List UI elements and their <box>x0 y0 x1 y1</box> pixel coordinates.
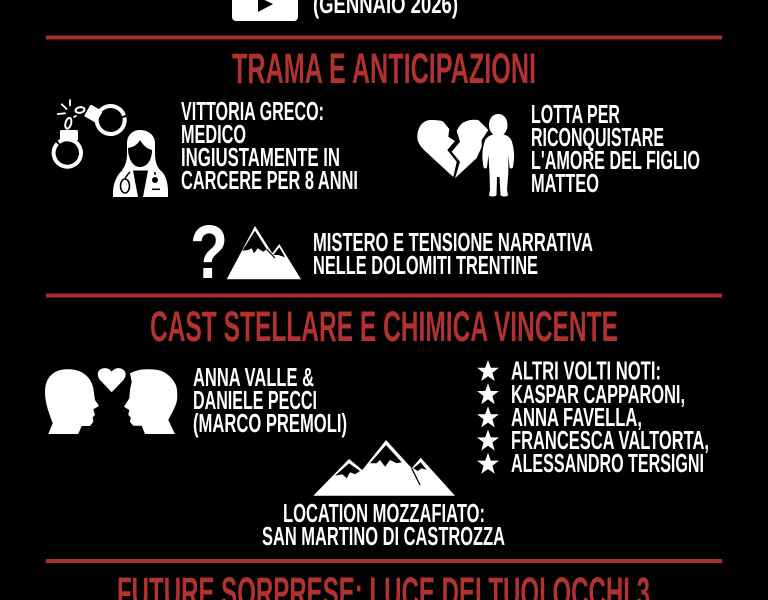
text: mistero e tensione: NELLE DOLOMITI TRENTINE <box>313 252 538 280</box>
icon: mountains <box>227 226 301 279</box>
icon: doctor <box>113 130 168 197</box>
text: anna valle: ANNA VALLE & <box>193 364 314 392</box>
heading: trama: TRAMA E ANTICIPAZIONI <box>232 46 536 93</box>
panel: cast stellare <box>45 304 709 551</box>
text: vittoria greco: INGIUSTAMENTE IN <box>181 144 340 172</box>
text: anna valle <box>193 364 347 438</box>
text: altri volti noti: ANNA FAVELLA, <box>511 404 642 432</box>
text: lotta per riconquistare: MATTEO <box>531 170 599 198</box>
text: vittoria greco: MEDICO <box>181 121 246 149</box>
panel: trama e anticipazioni <box>50 46 700 295</box>
text: altri volti noti: ALTRI VOLTI NOTI: <box>511 358 661 386</box>
icon: two heads and heart <box>45 368 177 434</box>
text: location <box>262 500 505 551</box>
text: location: SAN MARTINO DI CASTROZZA <box>262 523 505 551</box>
text: mistero e tensione <box>313 229 593 280</box>
text: vittoria greco: VITTORIA GRECO: <box>181 98 324 126</box>
text: altri volti noti <box>511 358 709 478</box>
text: vittoria greco <box>181 98 358 195</box>
text: location: LOCATION MOZZAFIATO: <box>283 500 485 528</box>
text: mistero e tensione: MISTERO E TENSIONE NARRATIVA <box>313 229 593 257</box>
icon: child <box>482 114 514 196</box>
text: lotta per riconquistare <box>531 101 700 198</box>
icon: video play button <box>232 0 298 21</box>
icon: broken heart <box>417 120 488 178</box>
icon: question mark: ? <box>190 210 228 295</box>
text: lotta per riconquistare: LOTTA PER <box>531 101 620 129</box>
text: anna valle: (MARCO PREMOLI) <box>193 410 347 438</box>
icon: broken handcuffs <box>50 100 130 171</box>
text: anna valle: DANIELE PECCI <box>193 387 317 415</box>
text: lotta per riconquistare: RICONQUISTARE <box>531 124 664 152</box>
icons: stars <box>477 360 499 474</box>
icon: large mountains <box>313 440 455 496</box>
text: vittoria greco: CARCERE PER 8 ANNI <box>181 167 358 195</box>
